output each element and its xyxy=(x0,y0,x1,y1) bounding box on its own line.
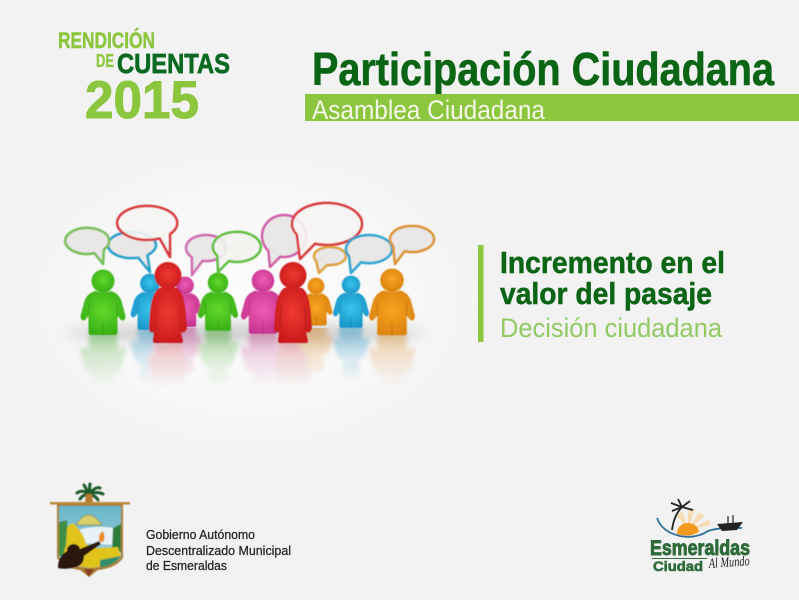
boat mast xyxy=(728,515,733,524)
green hillside right xyxy=(112,524,121,552)
text: De: DE xyxy=(96,51,114,71)
decision panel xyxy=(478,245,725,343)
wave xyxy=(657,518,742,537)
heading line 2: valor del pasaje xyxy=(500,276,712,311)
clouds xyxy=(78,527,118,545)
divider xyxy=(652,558,707,559)
icon: municipal coat of arms xyxy=(50,484,130,577)
text: 2015: 2015 xyxy=(85,71,199,130)
palm xyxy=(77,484,103,500)
heading line 1: Incremento en el xyxy=(500,245,725,280)
yellow mound xyxy=(62,523,121,568)
banner bar xyxy=(305,94,799,121)
logo: Esmeraldas Ciudad xyxy=(650,499,750,574)
floor shadow xyxy=(65,325,425,341)
municipality name xyxy=(146,527,291,573)
palm trunk and coconuts xyxy=(84,494,94,510)
text: Al Mundo: Al Mundo xyxy=(707,554,750,572)
text: Esmeraldas: Esmeraldas xyxy=(650,537,750,560)
line 2: Descentralizado Municipal xyxy=(146,543,291,558)
line 1: Gobierno Autónomo xyxy=(146,527,255,542)
green hillside left xyxy=(59,520,70,558)
line 3: de Esmeraldas xyxy=(146,558,227,573)
torch flame xyxy=(99,531,104,542)
text: Cuentas: CUENTAS xyxy=(117,48,230,79)
decision text: Decisión ciudadana xyxy=(500,313,723,343)
arch xyxy=(76,515,102,525)
boat xyxy=(717,522,743,531)
subtitle text: Asamblea Ciudadana xyxy=(312,95,546,125)
illustration: people with speech bubbles xyxy=(63,200,436,382)
figure xyxy=(58,541,101,569)
speech bubbles xyxy=(65,203,434,275)
accent bar xyxy=(478,245,484,342)
teal lower right xyxy=(100,556,121,567)
bottom point xyxy=(84,569,94,577)
people figures xyxy=(80,262,415,343)
text: Rendición: RENDICIÓN xyxy=(58,28,155,53)
shield sky xyxy=(59,506,121,568)
palm xyxy=(671,499,693,530)
logo: Rendición de Cuentas 2015 xyxy=(58,28,230,130)
sun rays xyxy=(676,508,711,530)
people reflections xyxy=(78,328,416,382)
sun xyxy=(677,523,699,536)
crossbar xyxy=(50,502,130,504)
text: Ciudad: Ciudad xyxy=(653,558,703,574)
subtitle banner xyxy=(305,94,799,125)
shield xyxy=(57,504,123,577)
